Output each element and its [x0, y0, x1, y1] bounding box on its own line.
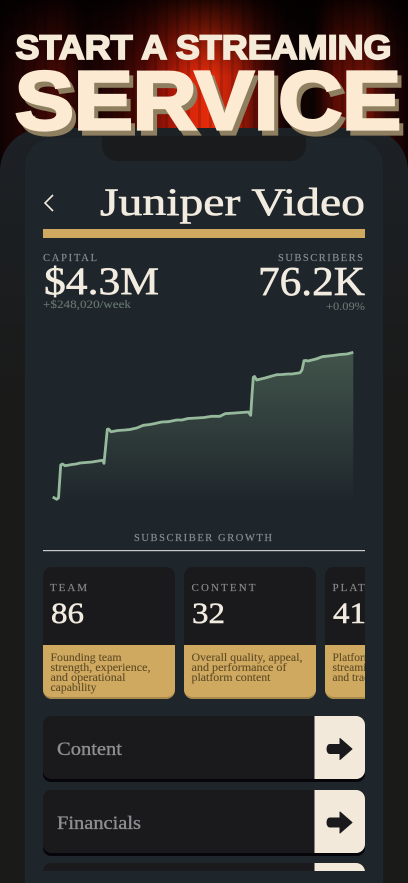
stat: capital: +$248,020/week — [43, 297, 131, 311]
stat cards row — [43, 567, 365, 699]
heading: Juniper Video: Juniper Video — [100, 181, 365, 224]
card: team: 86 — [51, 597, 84, 630]
card: content — [184, 567, 316, 699]
stat: subscribers: SUBSCRIBERS — [278, 253, 363, 264]
card: platform — [325, 567, 365, 699]
card: team: capability — [50, 682, 97, 694]
phone notch — [102, 136, 306, 161]
card: team: Founding team — [50, 652, 122, 664]
stat: capital — [43, 253, 159, 311]
card: team — [43, 567, 175, 699]
card: platform: 41 — [333, 597, 366, 630]
icon: arrow — [327, 812, 352, 833]
stat: subscribers: +0.09% — [326, 299, 365, 313]
phone screen — [25, 138, 383, 883]
button: content: Content — [57, 740, 123, 760]
chart caption: SUBSCRIBER GROWTH — [134, 533, 272, 544]
card: content: CONTENT — [192, 582, 256, 594]
card: content: Overall quality, appeal, — [192, 652, 303, 664]
card: team: and operational — [50, 672, 126, 684]
menu buttons — [43, 716, 365, 883]
stat: capital: CAPITAL — [43, 253, 97, 264]
card: platform: Platform — [332, 652, 373, 664]
stat: capital: $4.3M — [44, 260, 159, 303]
card: platform: and tracking — [332, 672, 390, 684]
title: service: SERVICE — [19, 59, 405, 152]
card: platform: streaming — [332, 662, 378, 674]
icon: back chevron — [45, 195, 53, 211]
button: financials: Financials — [57, 814, 141, 834]
card: content: and performance of — [192, 662, 287, 674]
button: partially visible — [43, 863, 365, 871]
area chart: subscriber growth — [53, 352, 353, 505]
card: platform: PLATFORM — [332, 582, 406, 594]
card: content: platform content — [192, 672, 271, 684]
button: content — [43, 716, 365, 782]
button: financials — [43, 790, 365, 856]
stat: subscribers: 76.2K — [258, 258, 365, 304]
card: content: 32 — [192, 597, 225, 630]
background: red stage curtain — [0, 0, 408, 170]
gold divider — [43, 229, 365, 238]
card: team: strength, experience, — [50, 662, 151, 674]
icon: arrow — [327, 738, 352, 760]
chart axis line — [43, 550, 365, 551]
card: team: TEAM — [50, 582, 87, 594]
title: start a streaming: START A STREAMING — [16, 29, 392, 67]
title: service: SERVICE — [15, 54, 401, 147]
